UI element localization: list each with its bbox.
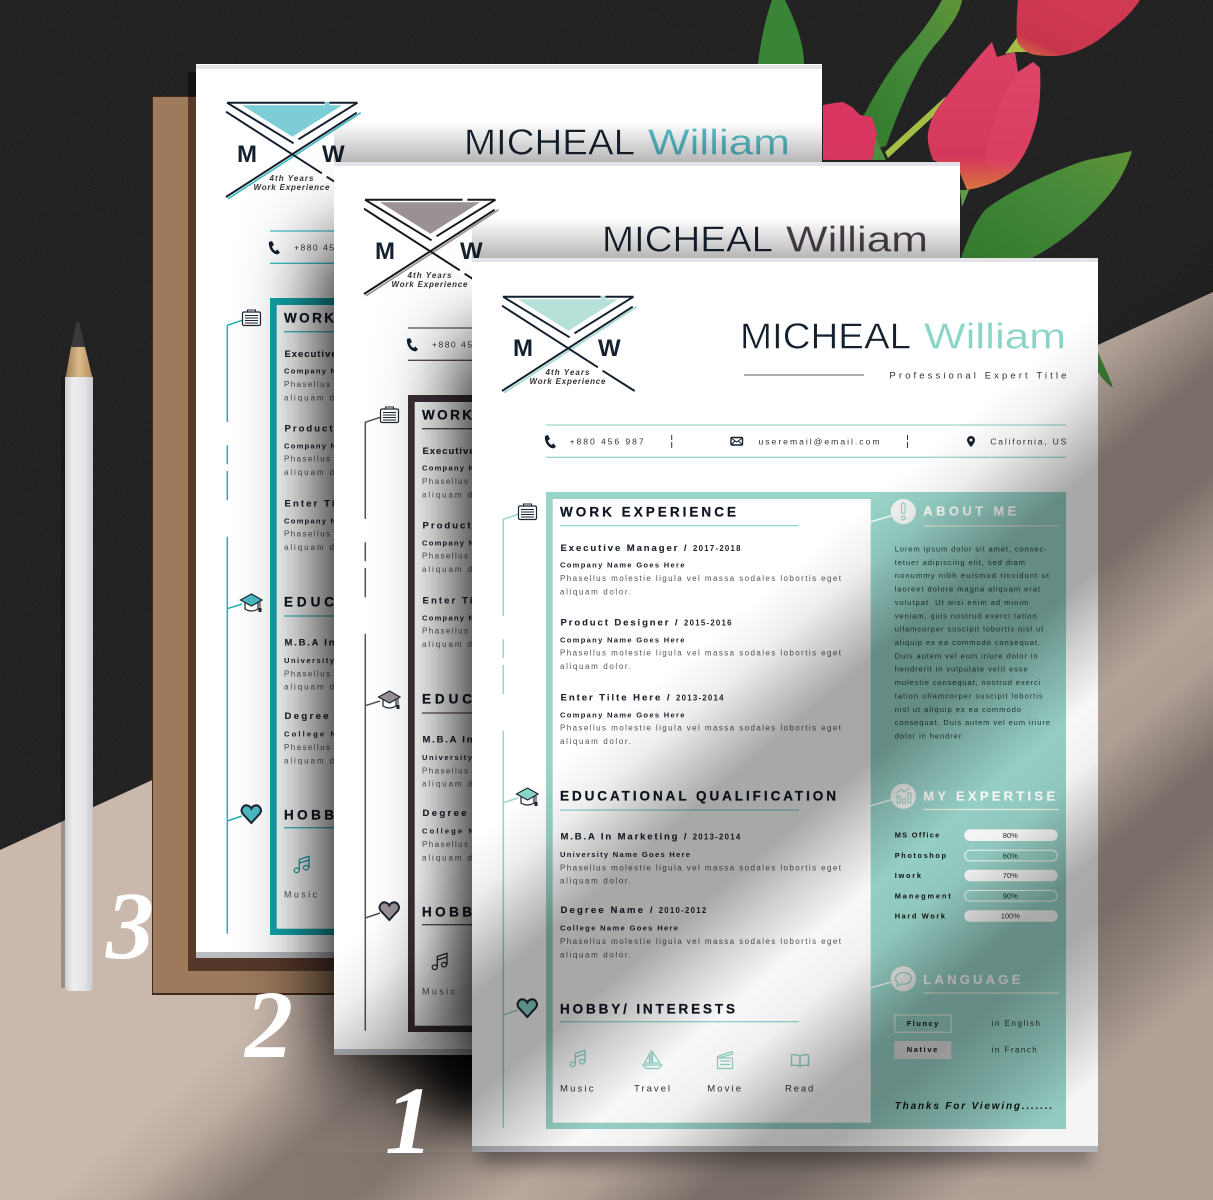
icon: movie clapper <box>718 1052 733 1068</box>
page 2 visible text: HOBB <box>422 904 472 919</box>
section: work experience: Enter Tilte Here / <box>560 693 670 704</box>
location: California, US <box>990 436 1067 446</box>
language: native row: in Franch <box>992 1046 1037 1055</box>
page 2 visible text: Phasellus <box>422 627 468 636</box>
page 3 (teal version, back) <box>196 64 822 958</box>
icon: sail boat <box>643 1050 662 1068</box>
panel: about me: consequat. Duis autem vel eum iriure <box>895 718 1050 727</box>
phone number: +880 456 987 <box>570 436 644 446</box>
tulip: large petal highlight <box>985 62 1040 171</box>
skill labels: Manegment <box>895 891 951 900</box>
logo: M <box>513 335 533 362</box>
icon: graduation cap <box>516 788 538 806</box>
skill labels <box>895 831 951 921</box>
section: educational qualification: University Name Goes Here <box>560 850 690 859</box>
section: educational qualification: M.B.A In Marketing / <box>560 831 687 842</box>
section: educational qualification: Phasellus molestie ligula vel massa sodales lobortis eget <box>560 863 842 872</box>
icon: briefcase <box>380 407 398 422</box>
section: hobby interests <box>560 1001 813 1095</box>
leaf: long <box>863 0 962 150</box>
page 3 contact row: +880 45 <box>294 242 334 252</box>
language: fluncy row: in English <box>992 1019 1040 1028</box>
page 3 visible text: aliquam d <box>284 543 334 552</box>
section: educational qualification <box>560 789 842 959</box>
page 2 visible text: aliquam d <box>422 780 472 789</box>
page 3 contact row <box>269 231 334 263</box>
page 3 visible text: HOBB <box>284 807 334 822</box>
page 2 (grey version, middle) <box>334 162 960 1055</box>
logo <box>502 296 637 393</box>
closing note: Thanks For Viewing....... <box>895 1101 1052 1112</box>
icon: briefcase <box>242 310 260 326</box>
page 3 logo: Work Experience <box>254 183 330 192</box>
page 2 sheet <box>334 162 960 1055</box>
icon: mail <box>731 438 742 445</box>
section: educational qualification: 2010-2012 <box>659 906 707 915</box>
page 2 visible text: Company N <box>422 464 474 473</box>
page 1 sheet <box>472 258 1098 1152</box>
hobby labels <box>560 1084 813 1095</box>
icon: open book <box>792 1055 808 1066</box>
skill percentages: 70% <box>1003 871 1018 880</box>
page 2 visible text: Phasellus <box>422 840 468 849</box>
page 2 visible text: aliquam d <box>422 640 472 649</box>
section: work experience: aliquam dolor. <box>560 662 631 671</box>
page 2 frame <box>408 395 508 1032</box>
page 2 logo: 4th Years <box>406 271 452 280</box>
page 2 visible text <box>422 408 474 997</box>
panel: about me: Lorem ipsum dolor sit amet, consec- <box>895 544 1047 553</box>
panel: about me: aliquip ex ea commodo consequat. <box>895 638 1040 647</box>
number 2: 2 <box>243 971 293 1078</box>
section: educational qualification: aliquam dolor. <box>560 877 631 886</box>
page 3 visible text: Degree <box>284 711 328 722</box>
panel: about me: laoreet dolore magna aliquam erat <box>895 584 1041 594</box>
section: educational qualification: EDUCATIONAL QUALIFICATION <box>560 789 836 804</box>
icon: music <box>570 1050 585 1067</box>
page 2 visible text: aliquam d <box>422 490 472 499</box>
pencil <box>61 322 93 991</box>
title: name <box>740 316 1066 356</box>
icon: speech bubble badge <box>891 966 916 991</box>
page 2 visible text: WORK <box>422 408 472 423</box>
section: work experience: Company Name Goes Here <box>560 636 684 645</box>
section: work experience: Phasellus molestie ligula vel massa sodales lobortis eget <box>560 724 842 733</box>
section: work experience: 2017-2018 <box>693 544 741 553</box>
section: work experience: aliquam dolor. <box>560 587 631 596</box>
page 3 visible text: aliquam d <box>284 468 334 477</box>
leaf: wide <box>961 151 1132 258</box>
skill labels: MS Office <box>895 831 939 840</box>
page 2 visible text: aliquam d <box>422 565 472 574</box>
panel: about me: Duis autem vel eum iriure dolor in <box>895 651 1038 660</box>
page 2 visible text: University <box>422 753 473 762</box>
skill percentages: 90% <box>1003 892 1018 900</box>
page 2 visible text: Product <box>422 521 471 532</box>
page 3 title: MICHEAL <box>464 122 635 162</box>
icon: graduation cap <box>378 691 400 709</box>
page 2 logo <box>364 200 499 296</box>
page 3 (teal version, back): William <box>648 122 790 162</box>
page 3 visible text: aliquam d <box>284 756 334 765</box>
tulip: small <box>823 102 877 160</box>
section: work experience: WORK EXPERIENCE <box>560 505 736 520</box>
panel: about me: ullamcorper suscipit lobortis nisl ut <box>895 625 1044 634</box>
section: work experience: 2015-2016 <box>684 619 732 628</box>
section: educational qualification: Phasellus molestie ligula vel massa sodales lobortis eget <box>560 937 842 946</box>
page 2 visible text: aliquam d <box>422 853 472 862</box>
title: name: William <box>924 316 1066 356</box>
section: work experience <box>560 505 842 746</box>
language: native row: Native <box>907 1045 937 1054</box>
page 2 title: MICHEAL <box>602 218 773 260</box>
panel: about me: nonummy nibh euismod tincidunt ut <box>895 571 1050 580</box>
section: work experience: Company Name Goes Here <box>560 561 684 570</box>
panel: about me: nisl ut aliquip ex ea commodo <box>895 705 1021 714</box>
shadow of page 2 on page 3 <box>324 122 884 1070</box>
panel: about me: veniam, quis nostrud exerci tation <box>895 611 1037 620</box>
background: beige paper <box>0 292 1213 1200</box>
skill percentages <box>1001 831 1020 921</box>
panel: about me: tation ullamcorper suscipit lobortis <box>895 692 1043 700</box>
page 1 (mint version, front) <box>472 258 1098 1152</box>
page 3 visible text: WORK <box>284 311 334 326</box>
skill labels: Hard Work <box>895 912 946 921</box>
page 2 logo: M <box>375 238 395 265</box>
icon: briefcase <box>518 504 536 520</box>
page 3 visible text <box>284 311 336 900</box>
panel: about me: ABOUT ME <box>923 504 1017 519</box>
section: work experience: Company Name Goes Here <box>560 710 684 719</box>
page 3 visible text: Enter Ti <box>284 499 334 510</box>
tulips <box>758 0 1140 388</box>
page 2 visible text: Company N <box>422 539 474 548</box>
page 3 visible text: Company N <box>284 367 336 376</box>
icon: heart <box>242 805 261 823</box>
section: educational qualification: Degree Name / <box>560 905 653 916</box>
icon: location pin <box>967 436 975 447</box>
page 2 contact row: +880 45 <box>432 339 472 349</box>
icon: phone <box>545 435 556 448</box>
cardboard shadow from page 3 <box>188 97 198 971</box>
skill labels: Photoshop <box>895 851 946 860</box>
page 3 visible text: University <box>284 656 335 665</box>
panel: about me: dolor in hendrer. <box>895 732 964 741</box>
page 3 visible text: EDUC <box>284 595 334 610</box>
skill percentages: 60% <box>1003 851 1018 860</box>
number 3: 3 <box>105 872 154 979</box>
section: work experience: Executive Manager / <box>560 543 687 554</box>
logo: 4th Years <box>544 368 590 377</box>
page 3 logo <box>226 102 361 199</box>
page 3 visible text: Product <box>284 424 333 435</box>
section: hobby interests: HOBBY/ INTERESTS <box>560 1001 735 1016</box>
page 3 visible text: Phasellus <box>284 669 330 678</box>
tulip stem top <box>1005 36 1027 54</box>
leaf: small base <box>872 139 886 160</box>
page 2 timeline <box>365 417 380 1031</box>
language: fluncy row <box>895 1015 1040 1032</box>
page 3 logo: M <box>237 141 257 168</box>
leaf: top left <box>758 0 804 64</box>
page 3 visible text: Phasellus <box>284 455 330 464</box>
page 3 visible text: Phasellus <box>284 380 330 389</box>
title: name: MICHEAL <box>740 316 911 356</box>
panel: language <box>870 966 1059 1059</box>
page 2 visible text: Enter Ti <box>422 596 472 607</box>
panel: about me: hendrerit in vulputate velit esse <box>895 665 1028 674</box>
beige shading right of and below the pages <box>250 292 1213 1200</box>
cardboard backing sheet <box>152 72 493 995</box>
icon: exclamation badge <box>891 499 916 524</box>
page 2 visible text: College N <box>422 827 474 836</box>
language: native row <box>894 1041 1037 1059</box>
page 3 visible text: aliquam d <box>284 683 334 692</box>
section: work experience: aliquam dolor. <box>560 737 631 746</box>
tulip: top <box>1017 0 1140 56</box>
hobby labels: Movie <box>707 1084 741 1095</box>
icon: heart <box>518 999 537 1017</box>
panel: about me: volutpat. Ut wisi enim ad minim <box>895 598 1028 607</box>
section: educational qualification: 2013-2014 <box>693 832 741 841</box>
panel: language: LANGUAGE <box>923 972 1021 987</box>
page 2 visible text: Degree <box>422 808 466 819</box>
page 3 visible text: Phasellus <box>284 743 330 752</box>
shadow below page 1 <box>480 1135 1090 1165</box>
hobby labels: Travel <box>634 1084 670 1095</box>
section: educational qualification: aliquam dolor. <box>560 950 631 959</box>
skill labels: Iwork <box>895 871 922 880</box>
hobby labels: Read <box>785 1084 813 1095</box>
stem: yellow green <box>885 97 948 158</box>
page 3 visible text: M.B.A In <box>284 637 335 648</box>
page 2 visible text: Executive <box>422 446 474 457</box>
page 3 logo: 4th Years <box>268 174 314 183</box>
timeline <box>503 514 518 1128</box>
page 2 visible text: Phasellus <box>422 766 468 775</box>
page 2 visible text: Company N <box>422 613 474 622</box>
icon: heart <box>380 902 399 920</box>
shadow below page 2 <box>420 1000 600 1110</box>
tulip stem bottom <box>960 190 969 207</box>
page 2 logo: Work Experience <box>392 280 468 289</box>
hobby labels: Music <box>560 1084 594 1095</box>
page 3 visible text: Company N <box>284 442 336 451</box>
section: work experience: 2013-2014 <box>676 694 724 703</box>
section: work experience: Phasellus molestie ligula vel massa sodales lobortis eget <box>560 574 842 583</box>
panel: main column <box>553 499 871 1123</box>
page 3 timeline <box>227 320 242 934</box>
panel: resume frame <box>546 492 1066 1129</box>
section: educational qualification: College Name Goes Here <box>560 924 678 933</box>
page 2 logo: W <box>460 238 483 265</box>
page 3 visible text: College N <box>284 730 336 739</box>
page 3 visible text: Company N <box>284 516 336 525</box>
number 1: 1 <box>385 1067 433 1174</box>
panel: my expertise <box>870 784 1059 922</box>
page 3 sheet <box>196 64 822 958</box>
page 2 visible text: Phasellus <box>422 477 468 486</box>
page 2 (grey version, middle): William <box>786 218 928 260</box>
page 2 contact row <box>407 328 472 360</box>
page 3 visible text: Music <box>284 890 318 900</box>
panel: about me: tetuer adipiscing elit, sed diam <box>895 558 1025 567</box>
page 3 visible text: Phasellus <box>284 530 330 539</box>
tulip: large <box>928 42 1040 190</box>
page 2 visible text: Phasellus <box>422 552 468 561</box>
logo: Work Experience <box>530 377 606 386</box>
page 2 visible text: Music <box>422 987 456 997</box>
email: useremail@email.com <box>758 436 880 446</box>
page 2 visible text: M.B.A In <box>422 734 473 745</box>
subtitle: Professional Expert Title <box>889 371 1066 382</box>
panel: my expertise: MY EXPERTISE <box>923 788 1055 803</box>
section: work experience: Phasellus molestie ligula vel massa sodales lobortis eget <box>560 649 842 658</box>
skill bars <box>964 829 1058 922</box>
panel: about me <box>870 499 1059 741</box>
language: fluncy row: Fluncy <box>907 1019 939 1028</box>
icon: graduation cap <box>240 594 262 612</box>
section: work experience: Product Designer / <box>560 618 678 629</box>
page 3 logo: W <box>322 141 345 168</box>
icon: chart badge <box>891 784 916 809</box>
skill percentages: 80% <box>1003 831 1018 840</box>
page 3 visible text: aliquam d <box>284 393 334 402</box>
panel: about me: molestie consequat, nostrud exerci <box>895 678 1041 687</box>
shadow of page 1 on page 2 <box>462 218 1002 1100</box>
page 2 visible text: EDUC <box>422 692 472 707</box>
contact row <box>545 425 1067 457</box>
page 3 visible text: Executive <box>284 349 336 360</box>
skill percentages: 100% <box>1001 912 1020 921</box>
leaf: behind page lower right <box>1098 352 1113 388</box>
page 3 frame <box>270 298 370 935</box>
logo: W <box>598 335 621 362</box>
